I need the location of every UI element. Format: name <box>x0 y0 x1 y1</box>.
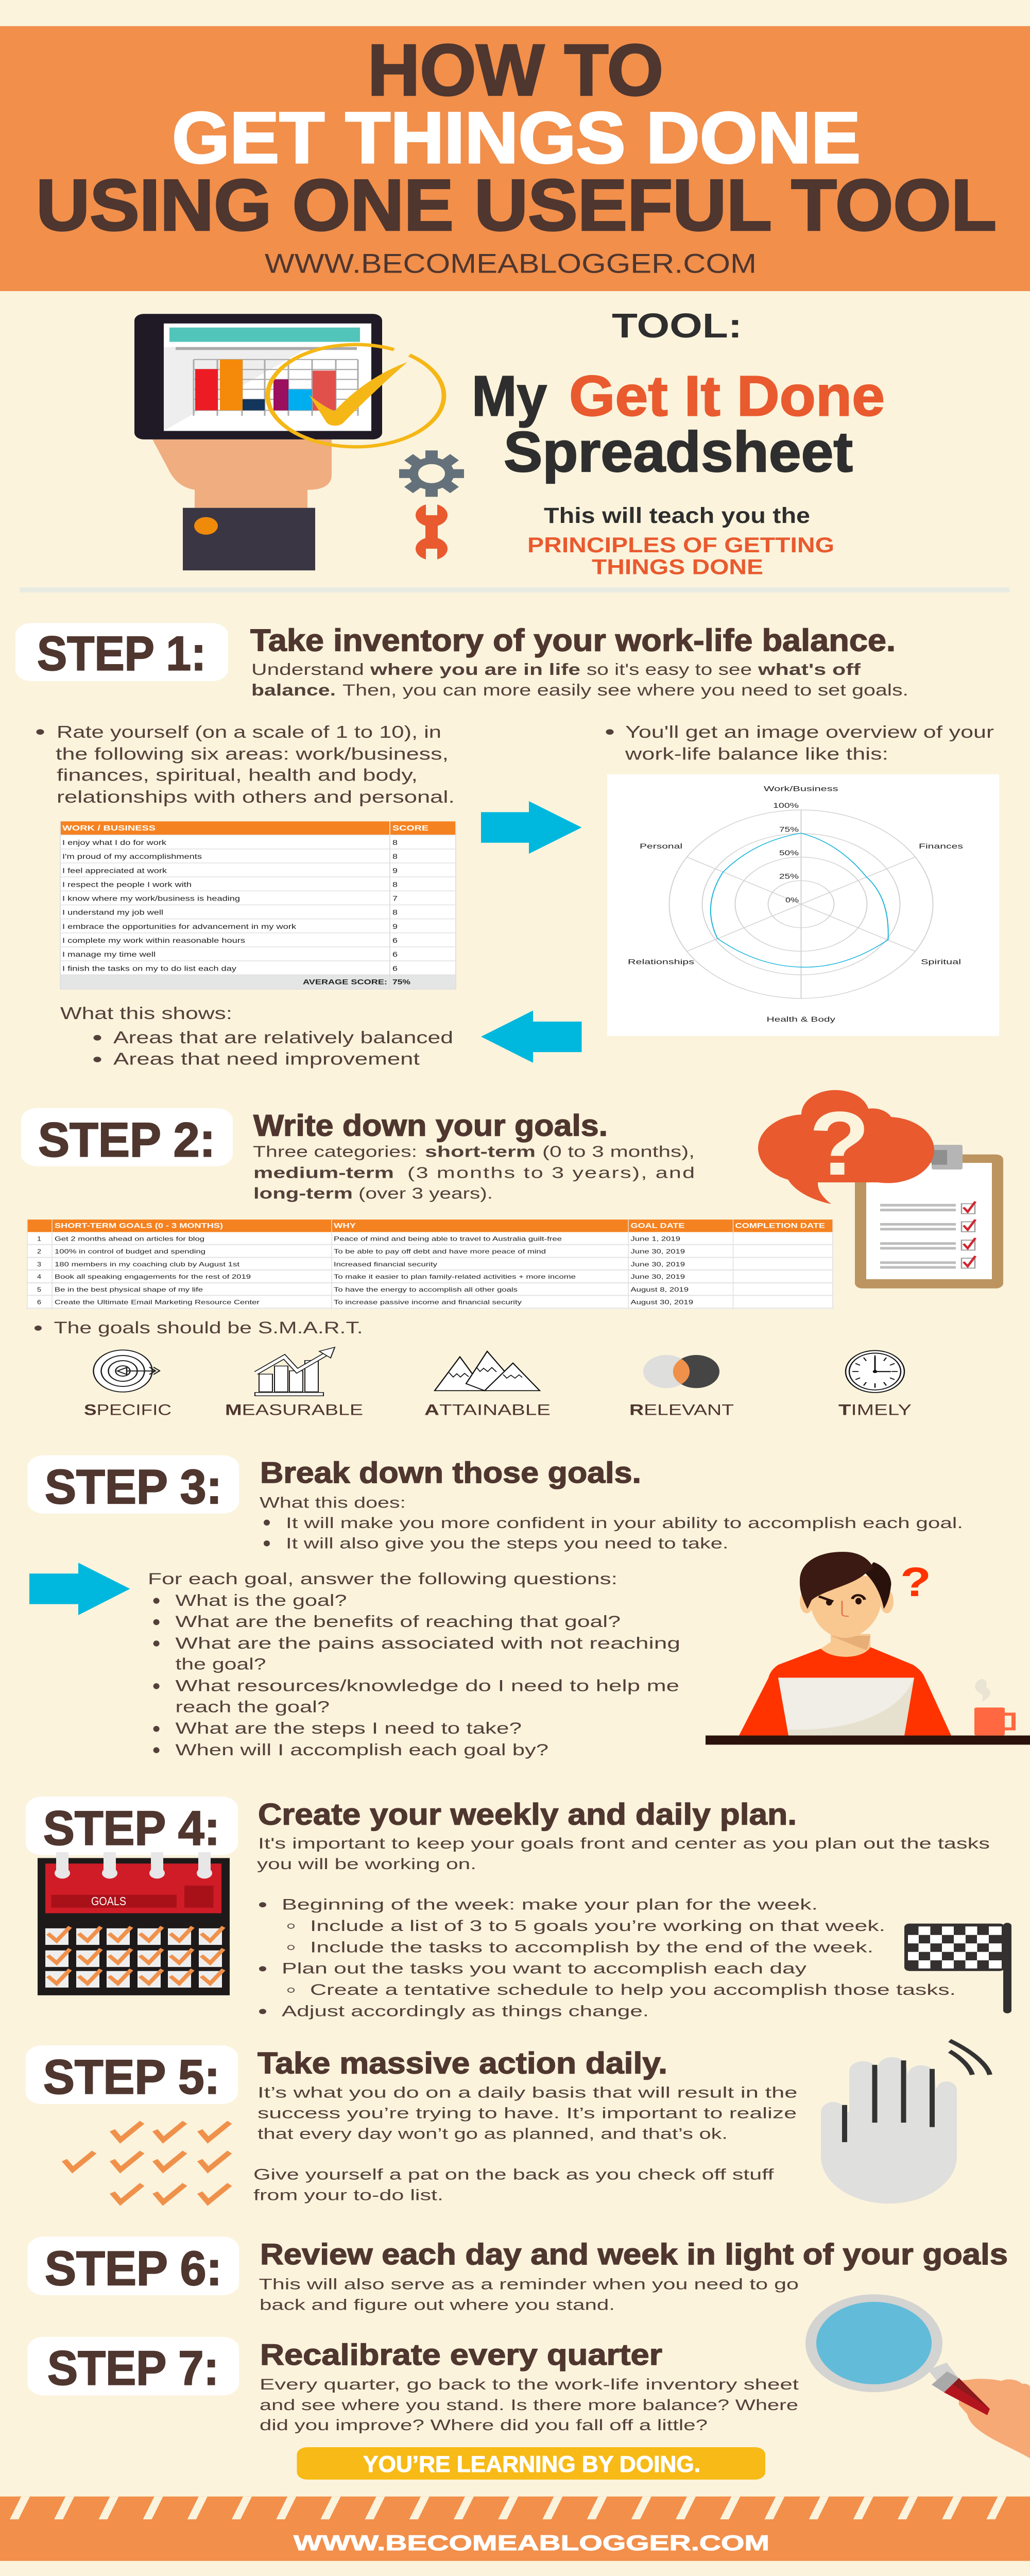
step 1 badge: STEP 1: <box>37 627 206 681</box>
step 5 badge <box>26 2045 238 2104</box>
icon: target <box>94 1350 160 1392</box>
chart: work-life balance radar: Health & Body <box>766 1015 835 1023</box>
step 4 badge <box>26 1797 238 1855</box>
principles line 2: THINGS DONE <box>592 554 763 579</box>
footer url: WWW.BECOMEABLOGGER.COM <box>294 2531 769 2555</box>
principles line 1: PRINCIPLES OF GETTING <box>527 533 834 557</box>
questions list: What are the pains associated with not reaching <box>175 1634 680 1652</box>
table: short-term goals: June 30, 2019 <box>630 1261 685 1268</box>
panel: step 5 <box>26 2041 990 2204</box>
arrow: pointing right to chart <box>481 801 582 854</box>
step 4 task list: Beginning of the week: make your plan for the week. <box>282 1896 818 1913</box>
image overview text: You'll get an image overview of your <box>625 722 994 742</box>
table: short-term goals: June 1, 2019 <box>630 1236 680 1243</box>
table: short-term goals: August 30, 2019 <box>630 1299 693 1306</box>
spreadsheet name line 1: My <box>472 364 547 428</box>
table: short-term goals: Get 2 months ahead on articles for blog <box>55 1236 204 1243</box>
questions list <box>148 1570 680 1759</box>
chart: work-life balance radar: Spiritual <box>921 957 961 966</box>
questions list: What resources/knowledge do I need to help me <box>175 1677 679 1695</box>
step 4 paragraph: It's important to keep your goals front and center as you plan out the tasks <box>258 1835 990 1852</box>
table: short-term goals: To increase passive income and financial security <box>334 1299 522 1306</box>
table: short-term goals: Book all speaking engagements for the rest of 2019 <box>55 1274 251 1280</box>
questions list: When will I accomplish each goal by? <box>175 1741 548 1759</box>
table: short-term goals: 180 members in my coaching club by August 1st <box>55 1261 239 1268</box>
what this does list: It will make you more confident in your ability to accomplish each goal. <box>286 1515 963 1532</box>
callout: learning by doing: YOU’RE LEARNING BY DOING. <box>363 2451 700 2477</box>
table: short-term goals <box>27 1219 833 1309</box>
table: short-term goals: 1 <box>37 1236 41 1243</box>
table: short-term goals: Create the Ultimate Email Marketing Resource Center <box>55 1299 260 1306</box>
table: short-term goals: COMPLETION DATE <box>735 1222 825 1230</box>
table: work / business scores: SCORE <box>392 823 428 832</box>
table: work / business scores: I embrace the opportunities for advancement in my work <box>62 923 297 930</box>
panel: tool heading <box>472 307 885 579</box>
step 5 paragraph: that every day won’t go as planned, and that’s ok. <box>258 2125 728 2142</box>
table: short-term goals: SHORT-TERM GOALS (0 - 3 MONTHS) <box>55 1222 223 1230</box>
table: short-term goals: Increased financial security <box>334 1261 438 1268</box>
step 7 paragraph <box>260 2376 799 2434</box>
icon: clipboard with checked tasks <box>855 1145 1003 1289</box>
table: short-term goals: 6 <box>37 1299 41 1306</box>
step 1 intro: Understand <box>251 660 364 679</box>
table: work / business scores: I manage my time well <box>62 951 156 958</box>
table: work / business scores: 9 <box>392 867 398 875</box>
table: work / business scores: I respect the people I work with <box>62 881 192 889</box>
table: work / business scores: 8 <box>392 881 398 889</box>
rating instruction <box>36 722 455 806</box>
questions list: reach the goal? <box>175 1698 330 1716</box>
panel: step 3 <box>28 1455 1030 1759</box>
step 6 badge: STEP 6: <box>45 2242 222 2296</box>
icon: hand holding magnifying glass <box>805 2294 1030 2458</box>
step 2 badge <box>21 1108 233 1167</box>
rating instruction: relationships with others and personal. <box>57 787 455 806</box>
step 2 title: Write down your goals. <box>253 1109 608 1142</box>
step 2 intro: (0 to 3 months), <box>542 1143 695 1160</box>
step 5 paragraph: Give yourself a pat on the back as you check off stuff <box>253 2166 774 2183</box>
website url: WWW.BECOMEABLOGGER.COM <box>265 248 757 279</box>
what this shows text <box>60 1003 453 1069</box>
spreadsheet name line 2: Spreadsheet <box>504 420 853 484</box>
panel: header banner <box>0 26 1030 291</box>
chart: work-life balance radar <box>607 774 999 1036</box>
icon: clock <box>846 1350 904 1393</box>
table: short-term goals: WHY <box>334 1222 356 1230</box>
step 6 badge <box>28 2236 239 2296</box>
questions list: What are the benefits of reaching that goal? <box>175 1613 621 1631</box>
icon: waving hand <box>821 2041 990 2204</box>
table: work / business scores: 75% <box>392 978 410 986</box>
spreadsheet name accent: Get It Done <box>569 364 885 428</box>
step 4 title: Create your weekly and daily plan. <box>258 1798 797 1832</box>
step 5 paragraph: It’s what you do on a daily basis that will result in the <box>258 2084 797 2101</box>
icon: checkered flag <box>904 1923 1011 2013</box>
table: work / business scores: WORK / BUSINESS <box>62 823 156 832</box>
table: short-term goals: To be able to pay off debt and have more peace of mind <box>334 1248 546 1255</box>
arrow: pointing left to text <box>481 1010 582 1063</box>
step 2 intro: (3 months to 3 years), and <box>407 1163 695 1181</box>
icon: wrench <box>416 503 448 561</box>
step 7 title: Recalibrate every quarter <box>260 2338 662 2371</box>
chart: work-life balance radar: 0% <box>785 895 799 904</box>
icon: hand holding tablet with chart <box>134 314 444 570</box>
table: short-term goals: 4 <box>37 1274 41 1280</box>
step 6 paragraph: back and figure out where you stand. <box>260 2296 615 2313</box>
smart labels: SPECIFIC <box>84 1401 171 1418</box>
step 4 task list: Adjust accordingly as things change. <box>282 2003 649 2020</box>
table: work / business scores: 6 <box>392 937 398 944</box>
icon: overlapping circles <box>643 1355 719 1388</box>
smart labels: RELEVANT <box>629 1401 734 1418</box>
what this shows text: Areas that are relatively balanced <box>113 1028 453 1047</box>
step 1 intro <box>251 660 908 699</box>
table: work / business scores: I complete my work within reasonable hours <box>62 937 245 944</box>
table: work / business scores: I finish the tasks on my to do list each day <box>62 965 237 973</box>
icon: question cloud: ? <box>809 1093 870 1194</box>
table: work / business scores: I feel appreciated at work <box>62 867 167 875</box>
table: short-term goals: August 8, 2019 <box>630 1286 689 1293</box>
step 1 badge <box>15 623 228 681</box>
step 4 paragraph <box>257 1835 990 1873</box>
chart: work-life balance radar: Relationships <box>628 957 694 966</box>
smart labels: ATTAINABLE <box>424 1401 551 1418</box>
step 2 intro <box>253 1143 695 1202</box>
table: work / business scores: 8 <box>392 853 398 860</box>
panel: step 4 <box>26 1797 1011 2020</box>
arrow: pointing to questions <box>29 1563 130 1615</box>
icon: mountains <box>435 1351 540 1391</box>
table: short-term goals: To make it easier to plan family-related activities + more income <box>334 1274 576 1280</box>
table: work / business scores <box>60 821 456 989</box>
chart: work-life balance radar: 100% <box>773 801 799 809</box>
step 7 paragraph: did you improve? Where did you fall off a little? <box>260 2417 708 2434</box>
panel: step 7 <box>28 2337 799 2434</box>
panel: footer <box>0 2497 1030 2561</box>
step 5 paragraph: from your to-do list. <box>253 2187 443 2204</box>
icon: question cloud <box>758 1090 934 1204</box>
step 2 intro: medium-term <box>253 1163 394 1181</box>
table: short-term goals: June 30, 2019 <box>630 1274 685 1280</box>
step 7 paragraph: and see where you stand. Is there more balance? Where <box>260 2397 798 2413</box>
tool label: TOOL: <box>612 307 742 345</box>
panel: step 1 <box>15 623 999 1069</box>
what this does list: What this does: <box>260 1494 406 1511</box>
step 7 badge <box>28 2337 239 2395</box>
table: work / business scores: 6 <box>392 965 398 973</box>
table: short-term goals: 3 <box>37 1261 41 1268</box>
icon: gear <box>399 450 464 497</box>
table: short-term goals: 2 <box>37 1248 41 1255</box>
teaser line: This will teach you the <box>544 503 810 528</box>
questions list: the goal? <box>175 1655 266 1673</box>
what this does list <box>260 1494 963 1552</box>
step 4 task list: Include a list of 3 to 5 goals you’re working on that week. <box>310 1918 885 1934</box>
smart labels: TIMELY <box>838 1401 912 1418</box>
step 3 badge: STEP 3: <box>45 1460 222 1514</box>
chart: work-life balance radar: Finances <box>919 842 963 850</box>
step 1 intro: balance. <box>251 681 336 699</box>
table: work / business scores: 7 <box>392 895 398 903</box>
step 5 paragraph: success you’re trying to have. It’s important to realize <box>258 2105 797 2122</box>
calendar rings <box>55 1852 212 1878</box>
step 1 intro: Then, you can more easily see where you need to set goals. <box>342 681 908 699</box>
step 5 title: Take massive action daily. <box>258 2046 667 2080</box>
step 4 task list: Plan out the tasks you want to accomplish each day <box>282 1960 806 1977</box>
icon: growth chart <box>255 1347 335 1396</box>
step 4 task list: Include the tasks to accomplish by the end of the week. <box>310 1939 873 1956</box>
table: work / business scores: I understand my job well <box>62 909 163 917</box>
table: short-term goals: 100% in control of budget and spending <box>55 1248 205 1255</box>
step 1 intro: so it's easy to see <box>587 660 752 679</box>
chart: work-life balance radar: Work/Business <box>764 785 838 793</box>
table: work / business scores: I enjoy what I do for work <box>62 839 167 846</box>
chart: work-life balance radar: 25% <box>779 872 799 880</box>
table: short-term goals: June 30, 2019 <box>630 1248 685 1255</box>
step 1 intro: what's off <box>758 660 861 679</box>
step 2 intro: (over 3 years). <box>358 1184 493 1202</box>
chart: work-life balance radar: 75% <box>779 825 799 834</box>
step 4 paragraph: you will be working on. <box>257 1856 476 1873</box>
icon: person thinking at laptop <box>706 1552 1030 1744</box>
what this shows text: Areas that need improvement <box>113 1049 420 1069</box>
step 7 paragraph: Every quarter, go back to the work-life inventory sheet <box>260 2376 799 2393</box>
step 4 task list: Create a tentative schedule to help you accomplish those tasks. <box>310 1981 956 1998</box>
icon: goals calendar <box>38 1858 230 1995</box>
table: short-term goals: 5 <box>37 1286 41 1293</box>
table: short-term goals: To have the energy to accomplish all other goals <box>334 1286 518 1293</box>
table: short-term goals: GOAL DATE <box>630 1222 684 1230</box>
table: work / business scores: I'm proud of my accomplishments <box>62 853 202 860</box>
questions list: What is the goal? <box>175 1591 347 1609</box>
title line: how to: HOW TO <box>368 30 663 111</box>
rating instruction: finances, spiritual, health and body, <box>57 765 418 785</box>
step 4 task list <box>259 1896 956 2020</box>
table: work / business scores: AVERAGE SCORE: <box>303 978 387 986</box>
step 5 paragraph <box>253 2084 797 2204</box>
table: short-term goals: Be in the best physical shape of my life <box>55 1286 203 1293</box>
what this shows text: What this shows: <box>60 1003 232 1023</box>
image overview text: work-life balance like this: <box>625 744 888 764</box>
table: short-term goals: Peace of mind and being able to travel to Australia guilt-free <box>334 1236 562 1243</box>
smart labels <box>84 1401 912 1418</box>
table: work / business scores: I know where my work/business is heading <box>62 895 240 903</box>
icon: orange check marks <box>64 2122 230 2202</box>
rating instruction: the following six areas: work/business, <box>56 744 449 764</box>
panel: step 6 <box>28 2236 1008 2313</box>
smart goals bullet: The goals should be S.M.A.R.T. <box>54 1318 363 1337</box>
smart labels: MEASURABLE <box>225 1401 363 1418</box>
questions list: What are the steps I need to take? <box>175 1719 522 1737</box>
step 5 badge: STEP 5: <box>43 2050 220 2104</box>
step 2 intro: long-term <box>253 1184 353 1202</box>
table: work / business scores: 9 <box>392 923 398 930</box>
table: work / business scores: 8 <box>392 839 398 846</box>
step 7 badge: STEP 7: <box>47 2342 219 2395</box>
image overview text <box>606 722 994 764</box>
step 3 title: Break down those goals. <box>260 1456 641 1489</box>
questions list: For each goal, answer the following questions: <box>148 1570 617 1588</box>
step 2 intro: short-term <box>425 1143 536 1160</box>
panel: step 2 <box>21 1090 1003 1418</box>
step 2 intro: Three categories: <box>253 1143 417 1160</box>
icon: goals calendar: GOALS <box>91 1894 126 1908</box>
step 1 intro: where you are in life <box>370 660 580 679</box>
callout: learning by doing <box>297 2447 765 2480</box>
table: work / business scores: 6 <box>392 951 398 958</box>
step 4 badge: STEP 4: <box>43 1802 220 1855</box>
rating instruction: Rate yourself (on a scale of 1 to 10), in <box>57 722 441 742</box>
chart: work-life balance radar: Personal <box>640 842 682 850</box>
step 2 badge: STEP 2: <box>38 1113 215 1167</box>
chart: work-life balance radar: 50% <box>779 849 799 857</box>
step 3 badge <box>28 1455 239 1514</box>
what this does list: It will also give you the steps you need to take. <box>286 1535 728 1552</box>
step 6 paragraph: This will also serve as a reminder when you need to go <box>259 2276 799 2293</box>
red question mark: ? <box>900 1559 931 1605</box>
step 6 paragraph <box>259 2276 799 2313</box>
table: work / business scores: 8 <box>392 909 398 917</box>
